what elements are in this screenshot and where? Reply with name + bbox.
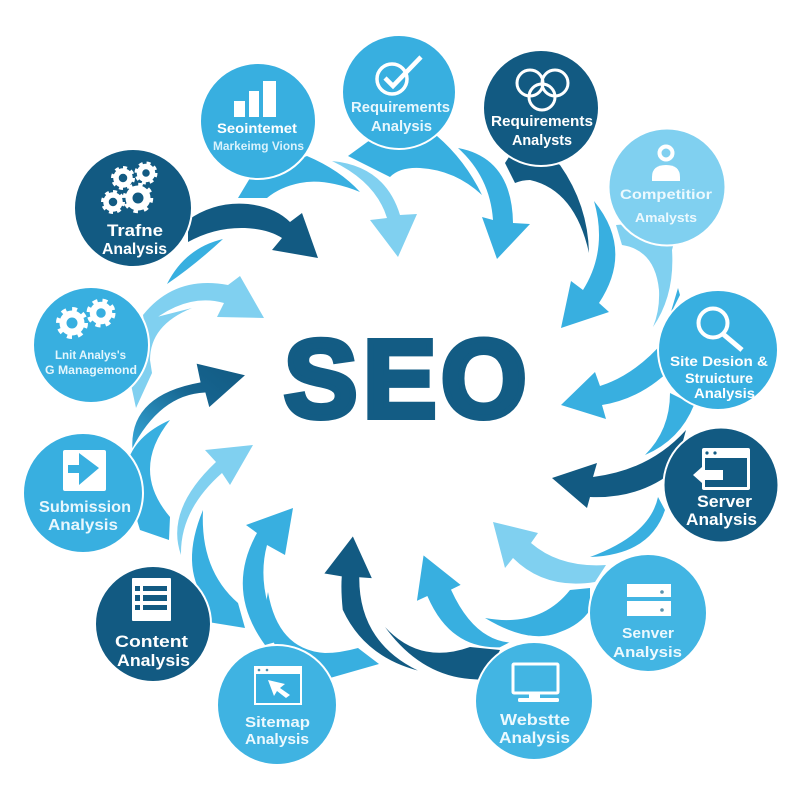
arrow: traffic to centre [188,204,318,258]
icon: monitor [513,664,559,702]
label [686,492,757,529]
label: Server [697,492,752,511]
label: Trafne [107,221,163,240]
icon: arrow box [63,450,106,491]
label [39,499,131,534]
node: Website [475,642,593,760]
icon: magnifier [698,308,742,350]
node: Requirements Analysts [483,50,599,166]
node: Server dark [664,428,778,542]
arrow: competition tail [616,220,680,327]
label: Sitemap [245,714,310,731]
label [613,625,682,661]
label [670,353,768,401]
label: Analysis [694,385,755,401]
arrow: senver crescent [485,588,590,636]
arrow: link to centre [143,276,264,327]
icon: person [652,146,680,181]
label: Lnit Analys's [55,350,126,362]
label: Analysis [686,510,757,529]
label: Analysts [512,132,572,149]
arrow: server to centre [552,430,686,508]
arrow: marketing tail [238,156,360,198]
label: Markeimg Vions [213,139,304,153]
arrow: senver light [493,522,606,584]
icon: gears [58,300,114,337]
label: Webstte [500,712,570,729]
arrow: top mid [458,148,530,259]
label: Analysis [245,731,309,748]
label [102,221,167,258]
label [491,113,593,149]
arrow: content tail [192,510,245,628]
arrow: link tail [130,308,192,408]
icon: bar chart [234,81,276,117]
label: Analysis [117,651,190,670]
icon: list [132,578,171,621]
node: Content [95,566,211,682]
node: Sitemap [217,645,337,765]
arrow: site design tail [645,393,694,455]
arrow: upper right mid [561,201,615,328]
label: Analysis [613,644,682,661]
arrow: small upper left sliver [167,239,223,284]
label: Senver [622,625,674,642]
arrow: requirements tail [348,136,482,195]
icon: gears [102,163,156,212]
arrow: website to centre [416,554,512,648]
arrow: small sliver by site design [670,288,680,315]
label [245,714,310,748]
node: Senver [589,554,707,672]
arrow: requirements analysts tail [505,140,589,253]
node: Requirements Analysis [342,35,456,149]
arrow: lower left light [177,445,253,555]
label [45,350,137,377]
arrow: site design to centre [561,340,670,419]
label: G Managemond [45,365,137,377]
label [620,186,713,225]
icon: venn circles [517,70,568,110]
icon: browser window [693,448,750,490]
node: Competition [608,128,726,246]
label: Analysis [102,241,167,258]
arrow: submission tail [125,420,170,540]
node: Seointemet Marketing [200,63,316,179]
label: Requirements [351,99,450,116]
label [115,632,190,670]
title: SEO: SEO [284,318,527,441]
arrow: bottom dark [323,535,425,673]
label [213,120,304,153]
label: Requirements [491,113,593,130]
label: Analysis [48,517,118,534]
label: Analysis [499,730,570,747]
node: Submission [23,433,143,553]
arrow: sitemap mid [243,508,293,645]
label: Amalysts [635,210,697,225]
icon: check badge [377,57,421,94]
label: Competitior [620,186,713,202]
icon: cursor window [254,666,302,705]
arrow: light top [332,161,417,257]
label: Seointemet [217,120,297,136]
node: Link Analysis [33,287,149,403]
arrow: sitemap tail [266,592,379,678]
label: Analysis [371,118,432,135]
label: Content [115,632,188,651]
label: Submission [39,499,131,516]
arrow: server lower tail [590,497,665,557]
icon: server stack [627,584,671,616]
label: Struicture [685,370,753,386]
label [351,99,450,135]
arrow: submission to centre [132,363,246,450]
arrow: website crescent [385,627,500,680]
label: Site Desion & [670,353,768,369]
label [499,712,570,747]
node: Site Design [658,290,778,410]
node: Traffic [74,149,192,267]
